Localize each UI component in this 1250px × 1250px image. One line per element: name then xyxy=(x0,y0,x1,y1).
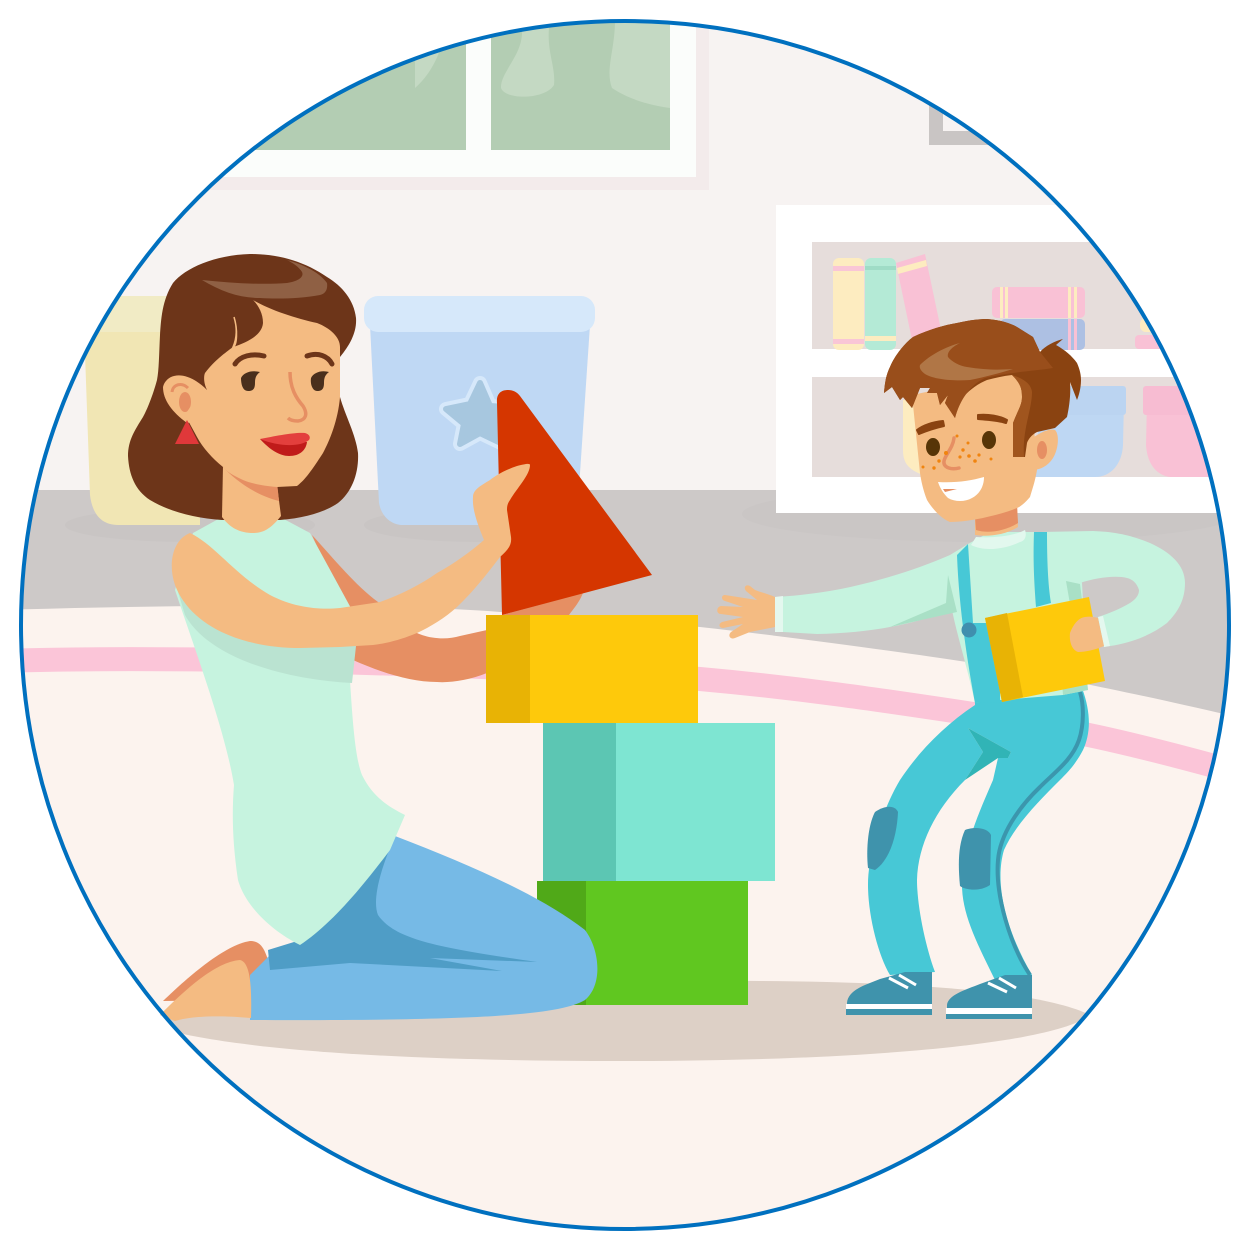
bookshelf xyxy=(776,205,1250,513)
overall bib and suspenders xyxy=(957,532,1051,703)
collar xyxy=(971,530,1026,549)
boy figure xyxy=(717,319,1185,1019)
yellow bin xyxy=(82,296,200,525)
ear xyxy=(163,375,210,423)
left sleeve shade xyxy=(890,575,957,627)
lips xyxy=(260,433,310,456)
top xyxy=(175,517,405,945)
knee patches xyxy=(867,807,991,890)
eyes xyxy=(241,371,329,391)
foot front xyxy=(160,960,251,1021)
pants xyxy=(868,688,1089,980)
shirt shade near sleeve xyxy=(1066,581,1082,604)
right sleeve xyxy=(1040,531,1185,647)
shirt torso and left sleeve xyxy=(775,532,1088,703)
hair highlight xyxy=(202,260,327,299)
pants fold xyxy=(965,728,1011,780)
floor shadow under shelf xyxy=(742,486,1238,542)
shoes xyxy=(846,972,1032,1019)
cuff xyxy=(775,596,783,632)
eyes xyxy=(926,431,996,456)
rug xyxy=(0,606,1250,1250)
hair sideburn xyxy=(1012,375,1032,457)
teal block xyxy=(543,723,775,881)
face xyxy=(185,300,340,487)
neck xyxy=(975,505,1018,536)
floor shadow under figures xyxy=(130,981,1090,1061)
pants stitching xyxy=(998,692,1083,975)
eyebrows xyxy=(235,354,332,364)
triangle block xyxy=(497,390,652,615)
earring xyxy=(175,420,199,444)
block stack xyxy=(537,723,775,1005)
smile xyxy=(938,477,984,501)
grey floor xyxy=(23,490,1227,714)
green block xyxy=(537,881,748,1005)
blue bin with star xyxy=(364,296,595,525)
back arm xyxy=(312,535,583,682)
window xyxy=(224,23,696,177)
eyebrows xyxy=(917,415,1007,434)
hair highlight xyxy=(920,343,1013,380)
foot back xyxy=(163,941,272,1001)
mother figure xyxy=(128,254,698,1021)
freckles xyxy=(922,434,992,470)
hair xyxy=(884,319,1081,457)
face xyxy=(912,370,1037,522)
hair xyxy=(128,254,358,520)
shelf bins xyxy=(903,386,1233,477)
left hand xyxy=(717,585,775,639)
ear xyxy=(1030,429,1058,470)
front arm and hand xyxy=(172,464,530,648)
nose xyxy=(288,372,306,421)
jeans xyxy=(250,836,597,1020)
star icon xyxy=(446,383,520,445)
nose xyxy=(944,438,959,469)
neck xyxy=(222,465,281,533)
yellow block xyxy=(486,615,698,723)
right hand xyxy=(1070,617,1104,652)
held yellow block xyxy=(985,597,1105,702)
floor shadow under bins xyxy=(65,508,315,542)
right cuff xyxy=(1098,616,1110,647)
hair upper lock xyxy=(884,319,1053,418)
books xyxy=(833,254,1175,350)
picture frame xyxy=(929,106,988,145)
